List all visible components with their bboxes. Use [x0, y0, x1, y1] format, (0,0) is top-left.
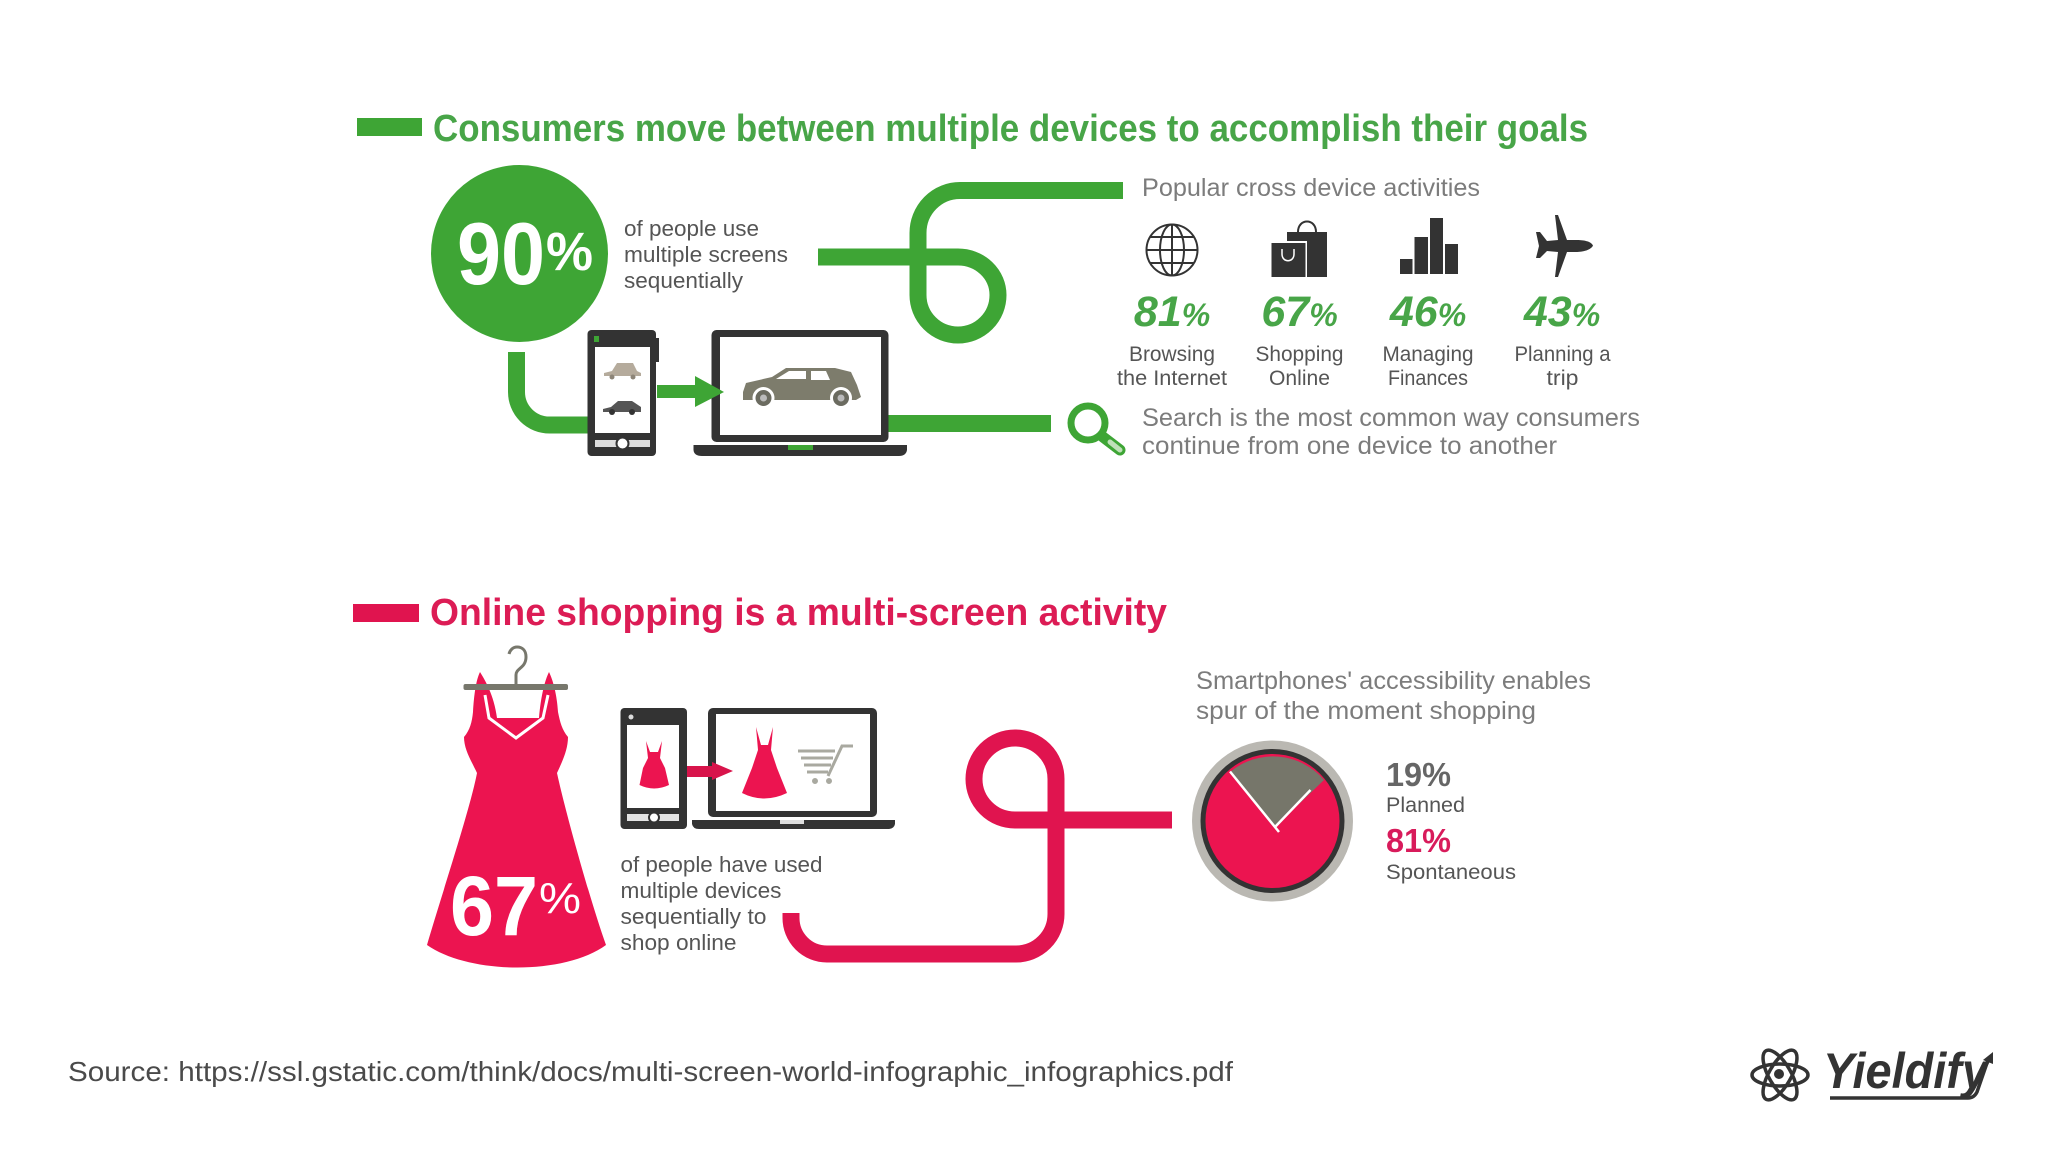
activity: browsing the internet: 81%: [1134, 288, 1210, 336]
activity: shopping online: 67%: [1261, 288, 1338, 336]
text: smartphones accessibility: [1196, 667, 1591, 725]
activity: browsing the internet: Browsing: [1129, 343, 1215, 366]
chart: clock pie 19% planned 81% spontaneous: [1192, 740, 1353, 902]
activity: managing finances: [1382, 218, 1474, 390]
text: of people have used multiple devices: of people have used: [620, 852, 822, 877]
stat circle: 90%: 90: [457, 204, 545, 303]
arrow: phone to laptop: [657, 376, 724, 407]
text: of people use multiple screens: sequentially: [624, 268, 743, 293]
ribbon: red loop: [791, 738, 1172, 954]
text: of people use multiple screens: [624, 216, 788, 293]
heading: consumers move between multiple devices: Consumers move between multiple devices to accomplish their goals: [433, 108, 1588, 150]
icon: dress on hanger with 67%: %: [539, 874, 581, 923]
icon: dress on hanger with 67%: 67: [450, 859, 538, 953]
section: consumers move between devices: [357, 108, 1640, 460]
stat circle: 90%: [431, 165, 608, 342]
activity: planning a trip: [1514, 215, 1611, 390]
icon: laptop with car: [694, 330, 907, 456]
activity: managing finances: Managing: [1382, 343, 1474, 366]
icon: laptop with dress and cart: [692, 708, 895, 829]
activity: planning a trip: trip: [1546, 367, 1578, 390]
text: of people have used multiple devices: sequentially to: [620, 904, 766, 929]
icon: atom: [1752, 1045, 1808, 1105]
activity: managing finances: 46%: [1389, 288, 1466, 336]
text: smartphones accessibility: spur of the moment shopping: [1196, 697, 1536, 725]
text: search is the most common way: [1142, 404, 1640, 460]
logo: Yieldify: [1752, 1043, 1993, 1105]
heading bar: green: [357, 118, 422, 136]
text: of people use multiple screens: of people use: [624, 216, 759, 241]
activity: planning a trip: 43%: [1523, 288, 1600, 336]
stat circle: 90%: %: [546, 222, 593, 282]
arrow: phone to laptop: [687, 762, 733, 780]
text: of people have used multiple devices: [620, 852, 822, 955]
activity: browsing the internet: the Internet: [1117, 367, 1227, 390]
activity: planning a trip: Planning a: [1514, 343, 1611, 366]
icon: smartphone with dress: [620, 708, 687, 829]
activity: browsing the internet: [1117, 224, 1227, 390]
activity: shopping online: Shopping: [1256, 343, 1344, 366]
legend: planned: [1386, 756, 1465, 817]
section: online shopping is multi-screen: [353, 592, 1591, 968]
legend: spontaneous: Spontaneous: [1386, 860, 1516, 884]
activity: managing finances: Finances: [1388, 367, 1468, 390]
heading bar: red: [353, 604, 419, 622]
icon: shopping cart: [798, 746, 853, 782]
legend: spontaneous: [1386, 822, 1516, 884]
legend: spontaneous: 81%: [1386, 822, 1451, 859]
text: search is the most common way: continue from one device to another: [1142, 432, 1557, 460]
legend: planned: 19%: [1386, 756, 1451, 793]
source line: Source: https://ssl.gstatic.com/think/docs/multi-screen-world-infographic_infographics.pdf: [68, 1056, 1233, 1087]
ribbon: green loop: [818, 190, 1123, 335]
ribbon: from circle to phone: [516, 352, 600, 425]
hanger: [464, 647, 568, 690]
icon: shopping bags: [1270, 222, 1327, 278]
text: of people use multiple screens: multiple screens: [624, 242, 788, 267]
ribbon: from laptop to search icon: [885, 415, 1051, 432]
activity: shopping online: Online: [1269, 367, 1330, 390]
text: smartphones accessibility: Smartphones' accessibility enables: [1196, 667, 1591, 695]
activity: shopping online: [1256, 222, 1344, 390]
heading: online shopping is a multi-screen activity: Online shopping is a multi-screen activity: [430, 592, 1167, 634]
icon: airplane: [1536, 215, 1593, 277]
icon: magnifying glass: [1071, 406, 1120, 450]
icon: smartphone with cars: [588, 330, 659, 456]
icon: bar chart: [1400, 218, 1458, 274]
text: search is the most common way: Search is the most common way consumers: [1142, 404, 1640, 432]
icon: dress on hanger with 67%: [427, 647, 606, 968]
text: of people have used multiple devices: shop online: [620, 930, 736, 955]
logo: Yieldify: Yieldify: [1823, 1043, 1990, 1099]
legend: planned: Planned: [1386, 793, 1465, 817]
text: of people have used multiple devices: multiple devices: [620, 878, 782, 903]
subheading: popular cross device activities: Popular cross device activities: [1142, 174, 1480, 202]
icon: globe: [1146, 224, 1198, 276]
